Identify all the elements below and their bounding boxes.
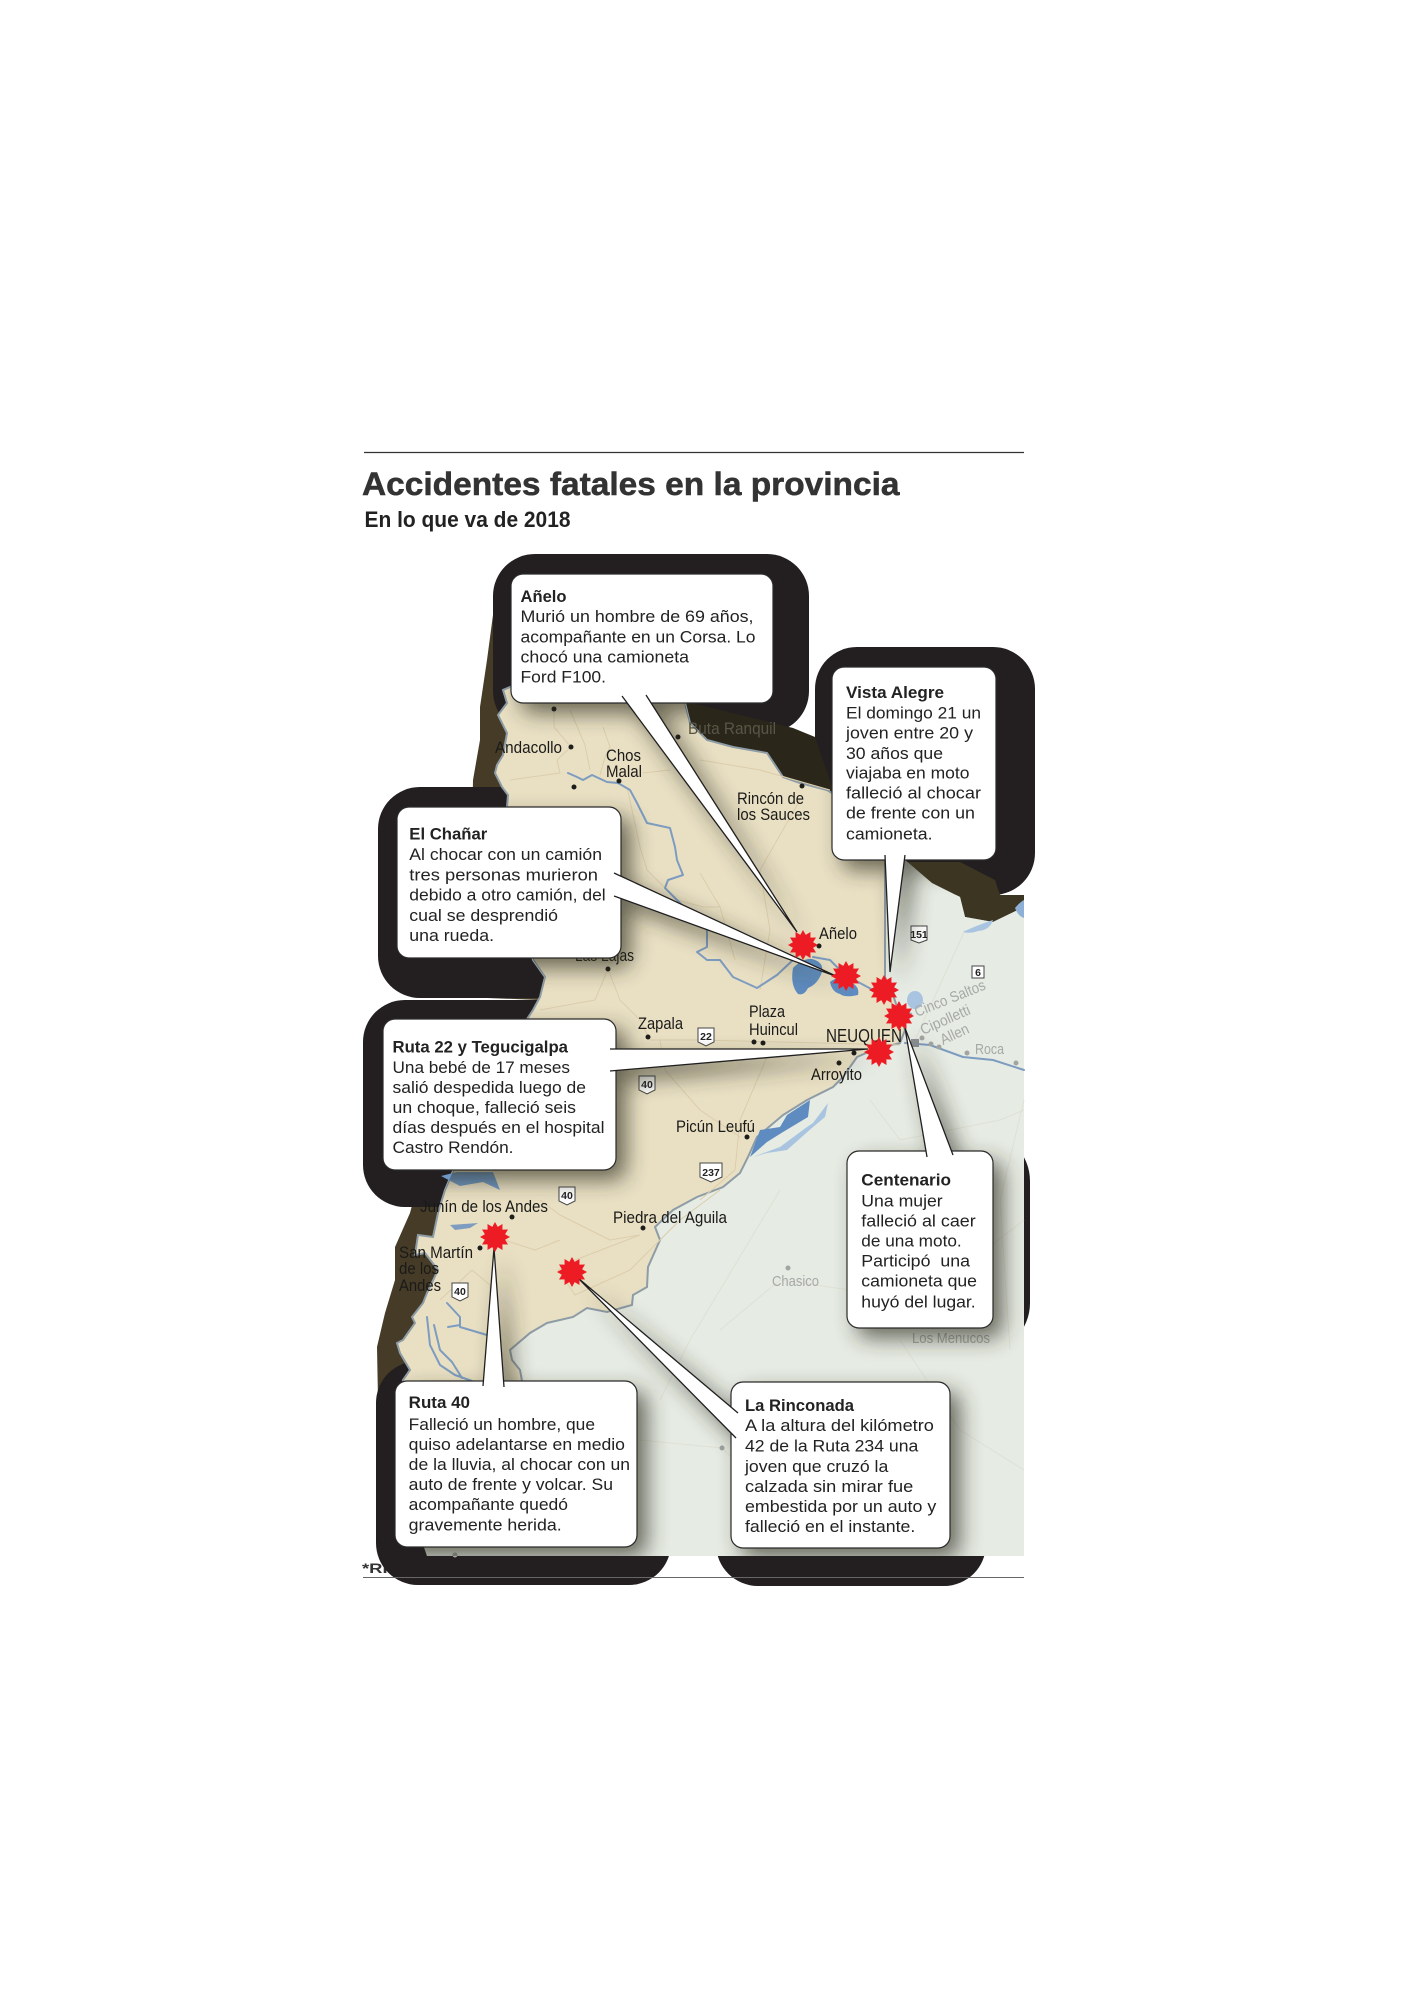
grey labels of neighbouring province [772, 977, 1005, 1347]
callout: Ruta 22 y Tegucigalpa [383, 1019, 868, 1170]
callout text: La Rinconada: La Rinconada [745, 1397, 855, 1415]
title: Accidentes fatales en la provincia [362, 466, 900, 502]
subtitle: En lo que va de 2018 [364, 507, 570, 532]
province dark halo [377, 600, 700, 1556]
soft callout shadows on map [404, 687, 1020, 1556]
callout text: Ruta 22: un choque, falleció seis [392, 1099, 576, 1117]
city labels: Andacollo [495, 739, 562, 757]
callout text: Añelo: Murió un hombre de 69 años, [520, 608, 754, 626]
route shields: 40 [641, 1079, 653, 1091]
callout text: Ruta 22: días después en el hospital [392, 1119, 604, 1137]
grey city dots [452, 1012, 1018, 1558]
dark shadow blobs behind callouts [363, 554, 1035, 1586]
map: Neuquén province [397, 680, 905, 1500]
city labels: Añelo [819, 925, 857, 943]
bottom rule [363, 1576, 1024, 1578]
callout text: El Chañar [409, 825, 606, 945]
callout text: Centenario [861, 1172, 977, 1311]
callout: Vista Alegre [832, 667, 996, 972]
callout text: El Chañar: El Chañar [409, 825, 488, 843]
callout text: Vista Alegre [845, 684, 982, 843]
route shields: 40 [561, 1190, 573, 1202]
city labels: Malal [606, 763, 642, 781]
callout text: El Chañar: Al chocar con un camión [409, 846, 602, 864]
callout text: Añelo: Añelo [520, 588, 566, 606]
grey labels of neighbouring province: Roca [975, 1041, 1005, 1058]
roads on neighbouring territory [640, 930, 1024, 1470]
callout text: Centenario: camioneta que [861, 1273, 977, 1291]
callout text: La Rinconada: embestida por un auto y [745, 1498, 937, 1516]
route shields [452, 926, 984, 1301]
callout text: Añelo: chocó una camioneta [520, 648, 690, 666]
callout text: El Chañar: debido a otro camión, del [409, 887, 606, 905]
callout text: Ruta 40: gravemente herida. [409, 1517, 562, 1535]
callout text: Ruta 22: salió despedida luego de [392, 1079, 586, 1097]
east dark region [905, 862, 1024, 922]
callout text: Ruta 40: quiso adelantarse en medio [409, 1436, 625, 1454]
grey labels of neighbouring province: Allen [938, 1021, 972, 1049]
callout text: Vista Alegre: de frente con un [846, 804, 975, 822]
rivers [427, 773, 1024, 1381]
callout text: Añelo: Ford F100. [520, 669, 606, 687]
city labels: San Martín [399, 1244, 473, 1262]
city labels: Picún Leufú [676, 1118, 755, 1136]
route shields: 40 [454, 1286, 466, 1298]
route shields: 6 [975, 967, 981, 979]
city labels: Las Lajas [575, 947, 634, 965]
callout text: Ruta 22: Castro Rendón. [392, 1139, 514, 1157]
callout text: Vista Alegre: El domingo 21 un [846, 704, 981, 722]
north-east dark region [680, 700, 840, 810]
city marker: Neuquén square [911, 1039, 919, 1047]
roads on province [440, 709, 900, 1330]
callout text: Centenario: Una mujer [861, 1193, 943, 1211]
callout text: Vista Alegre: joven entre 20 y [845, 724, 974, 742]
callout text: Centenario: huyó del lugar. [861, 1293, 976, 1311]
callout text: La Rinconada: A la altura del kilómetro [745, 1417, 934, 1435]
route shields: 151 [910, 929, 928, 941]
callout text: Vista Alegre: viajaba en moto [846, 764, 970, 782]
callout: Centenario [847, 1028, 993, 1328]
city dots [478, 706, 856, 1250]
callout text: Vista Alegre: Vista Alegre [846, 684, 944, 702]
map: neighbouring territory [415, 855, 1024, 1556]
callout text: Ruta 40: auto de frente y volcar. Su [409, 1476, 613, 1494]
city labels: NEUQUEN [826, 1026, 902, 1046]
city labels: Piedra del Aguila [613, 1209, 728, 1227]
grey labels of neighbouring province: Cinco Saltos [912, 977, 988, 1021]
callout: Ruta 40 [395, 1248, 637, 1547]
grey labels of neighbouring province: Los Menucos [912, 1330, 990, 1347]
city labels: de los [399, 1260, 439, 1278]
city labels [399, 720, 902, 1295]
callout text: Vista Alegre: falleció al chocar [846, 784, 982, 802]
city labels: Plaza [749, 1003, 786, 1021]
source note: *RÍO [362, 1560, 402, 1576]
callout text: La Rinconada [744, 1397, 937, 1536]
callout text: Centenario: Participó una [861, 1253, 971, 1271]
city labels: Chos [606, 747, 641, 765]
callout text: Ruta 22: Ruta 22 y Tegucigalpa [392, 1039, 569, 1057]
callout text: El Chañar: una rueda. [409, 927, 494, 945]
callout text: Ruta 22: Una bebé de 17 meses [392, 1059, 570, 1077]
callout text: El Chañar: tres personas murieron [409, 867, 598, 885]
city labels: Junín de los Andes [420, 1198, 548, 1216]
lakes [441, 900, 1024, 1230]
callout text: La Rinconada: joven que cruzó la [744, 1458, 889, 1476]
callout text: Vista Alegre: 30 años que [846, 745, 943, 763]
city labels: Arroyito [811, 1066, 862, 1084]
callout text: Centenario: de una moto. [861, 1233, 962, 1251]
callout text: Añelo: acompañante en un Corsa. Lo [520, 628, 756, 646]
city labels: Huincul [749, 1021, 798, 1039]
accident markers [480, 930, 914, 1287]
callout text: La Rinconada: 42 de la Ruta 234 una [745, 1437, 919, 1455]
route shields: 237 [702, 1167, 720, 1179]
callout text: La Rinconada: calzada sin mirar fue [745, 1478, 913, 1496]
callout: El Chañar [397, 807, 838, 977]
callout text: Ruta 40 [409, 1394, 630, 1535]
callout text: Ruta 40: Ruta 40 [409, 1394, 470, 1412]
callout text: Centenario: Centenario [861, 1172, 951, 1190]
grey labels of neighbouring province: Chasico [772, 1273, 819, 1290]
callout text: Ruta 40: acompañante quedó [409, 1496, 568, 1514]
callout text: Ruta 22 [392, 1039, 604, 1157]
callout text: Ruta 40: de la lluvia, al chocar con un [409, 1456, 630, 1474]
city labels: Rincón de [737, 790, 804, 808]
callout text: Vista Alegre: camioneta. [846, 825, 932, 843]
callout: Añelo [511, 574, 797, 932]
city labels: Andes [399, 1277, 441, 1295]
callout text: Ruta 40: Falleció un hombre, que [409, 1416, 595, 1434]
callout text: Añelo [520, 588, 756, 687]
callout: La Rinconada [578, 1278, 950, 1548]
callout text: La Rinconada: falleció en el instante. [745, 1518, 915, 1536]
city labels: Zapala [638, 1015, 684, 1033]
city labels: los Sauces [737, 806, 810, 824]
route shields: 22 [700, 1031, 712, 1043]
top rule [364, 452, 1024, 454]
callout text: El Chañar: cual se desprendió [409, 907, 558, 925]
grey labels of neighbouring province: Cipolletti [918, 1002, 973, 1039]
callout text: Centenario: falleció al caer [861, 1213, 976, 1231]
city labels: Buta Ranquil [688, 720, 776, 738]
